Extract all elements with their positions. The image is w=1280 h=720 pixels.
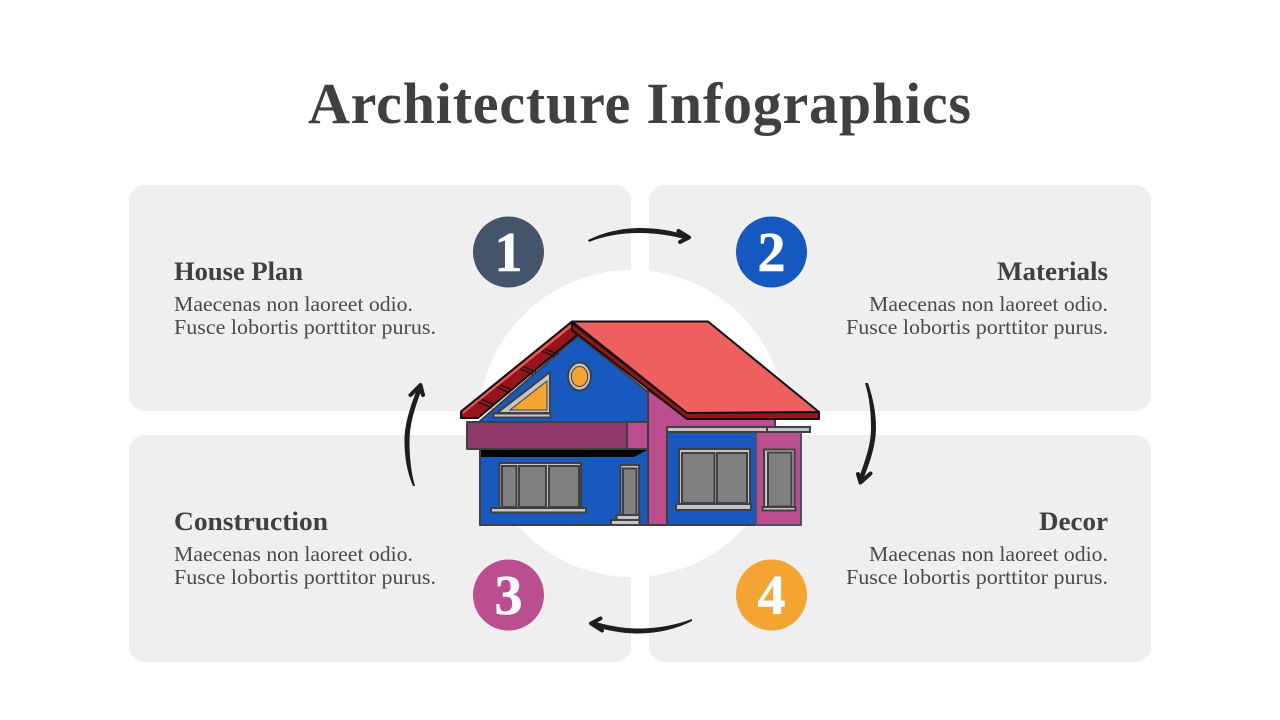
arrow: step 1 to 2 xyxy=(588,228,689,242)
heading: decor: Decor xyxy=(1039,507,1108,536)
house: triangular attic window xyxy=(494,372,550,418)
badge: number 3 xyxy=(473,560,544,630)
badge: number 2 xyxy=(736,216,807,288)
text: house plan description: Fusce lobortis porttitor purus. xyxy=(174,315,436,339)
text: materials description: Maecenas non laoreet odio. xyxy=(869,292,1108,316)
house: right beam xyxy=(667,427,810,432)
heading: materials: Materials xyxy=(997,257,1108,286)
arrow: step 3 to 1 xyxy=(404,385,423,486)
house: awning band xyxy=(467,422,648,449)
panel: construction xyxy=(129,435,631,662)
house: awning shadow xyxy=(481,450,647,457)
panel: decor xyxy=(649,435,1151,662)
heading: house plan: House Plan xyxy=(174,257,304,286)
house: right roof fascia xyxy=(572,323,819,419)
text: decor description: Maecenas non laoreet odio. xyxy=(869,542,1108,566)
house: pink wing xyxy=(756,432,801,525)
house: three-pane window xyxy=(491,463,586,512)
house: double window xyxy=(676,449,751,510)
arrow: step 4 to 3 xyxy=(591,618,692,634)
house: pink upper wall xyxy=(648,390,775,525)
house: lower blue wall left xyxy=(480,449,648,525)
text: construction description: Maecenas non laoreet odio. xyxy=(174,542,413,566)
text: construction description: Fusce lobortis porttitor purus. xyxy=(174,565,436,589)
heading: construction: Construction xyxy=(174,507,329,536)
panel: house plan xyxy=(129,185,631,411)
title: Architecture Infographics xyxy=(308,71,971,136)
text: decor description xyxy=(846,542,1108,589)
text: house plan description xyxy=(174,292,436,339)
house: oval window xyxy=(568,362,591,390)
house: left eave xyxy=(461,322,577,418)
badge: number 4 xyxy=(736,560,807,630)
house: red roof xyxy=(572,322,819,413)
text: materials description: Fusce lobortis porttitor purus. xyxy=(846,315,1108,339)
badge: number 1: 1 xyxy=(494,222,522,284)
text: decor description: Fusce lobortis porttitor purus. xyxy=(846,565,1108,589)
panel: materials xyxy=(649,185,1151,411)
text: construction description xyxy=(174,542,436,589)
central white circle xyxy=(478,270,786,577)
house: narrow window xyxy=(762,450,796,510)
house: upper blue gable xyxy=(480,336,648,423)
text: house plan description: Maecenas non laoreet odio. xyxy=(174,292,413,316)
house: lower blue wall right xyxy=(667,432,756,525)
badge: number 2: 2 xyxy=(758,222,786,284)
badge: number 4: 4 xyxy=(758,565,786,627)
illustration: house xyxy=(461,322,819,525)
arrow: step 2 to 4 xyxy=(858,383,876,482)
badge: number 3: 3 xyxy=(494,565,522,627)
text: materials description xyxy=(846,292,1108,339)
house: door xyxy=(611,465,640,525)
badge: number 1 xyxy=(473,216,544,288)
